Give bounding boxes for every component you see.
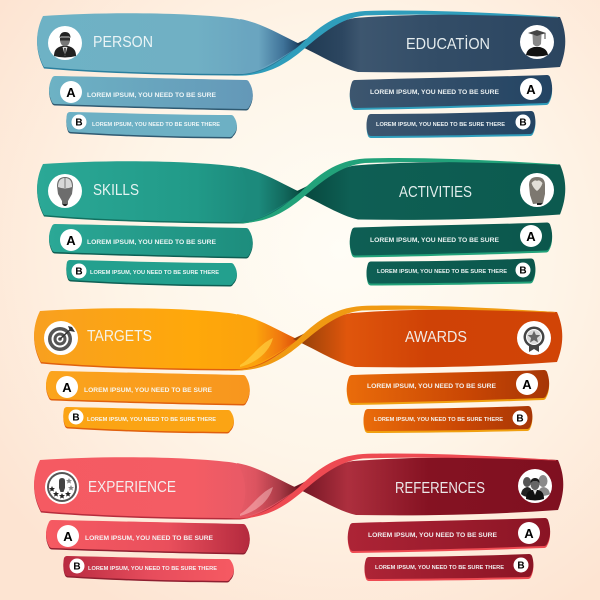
heading: experience: EXPERIENCE (88, 479, 176, 496)
sub-bar B: experience: B (73, 562, 81, 572)
twist band: experience to references (223, 453, 556, 519)
sub-bar B: person (66, 112, 237, 138)
heading: targets: TARGETS (87, 328, 152, 345)
sub-bar B: education (366, 111, 535, 138)
ribbon: education (296, 14, 565, 72)
sub-bar A: references: A (524, 526, 534, 541)
panel: experience (34, 457, 299, 582)
panel: skills (37, 161, 302, 286)
sub-bar B: person: B (75, 118, 83, 128)
sub-bar A: targets (46, 371, 250, 406)
sub-bar B: activities: B (519, 266, 527, 276)
ribbon: skills (37, 161, 302, 224)
heading: person: PERSON (93, 34, 153, 51)
icon: group of three people (518, 469, 552, 503)
heading: skills: SKILLS (93, 182, 139, 199)
sub-bar B: person: LOREM IPSUM, YOU NEED TO BE SURE THERE (92, 122, 220, 128)
ribbon: references (294, 458, 563, 515)
twist band: person to education (225, 10, 558, 76)
heading: activities: ACTIVITIES (399, 184, 472, 201)
sub-bar B: skills (66, 260, 237, 286)
sub-bar B: activities: LOREM IPSUM, YOU NEED TO BE SURE THERE (377, 269, 507, 275)
ribbon: awards (293, 310, 562, 367)
sub-bar A: targets: LOREM IPSUM, YOU NEED TO BE SURE (84, 387, 213, 394)
panel: awards (222, 305, 562, 433)
sub-bar B: experience: LOREM IPSUM, YOU NEED TO BE SURE THERE (88, 566, 217, 572)
sub-bar B: experience (63, 556, 234, 582)
sub-bar A: awards: A (522, 377, 532, 392)
icon: graduate (520, 25, 554, 59)
sub-bar A: experience: LOREM IPSUM, YOU NEED TO BE SURE (85, 535, 214, 542)
sub-bar A: targets: A (62, 380, 72, 395)
sub-bar A: skills (49, 224, 253, 258)
panel: targets (34, 308, 299, 434)
panel: education (225, 10, 565, 138)
sub-bar A: education: LOREM IPSUM, YOU NEED TO BE SURE (370, 89, 500, 96)
sub-bar B: references: LOREM IPSUM, YOU NEED TO BE SURE THERE (375, 565, 504, 571)
twist band: skills to activities (225, 158, 558, 223)
sub-bar A: awards: LOREM IPSUM, YOU NEED TO BE SURE (367, 383, 497, 390)
icon: man with glasses and suit (48, 26, 82, 60)
sub-bar A: education: A (526, 82, 536, 97)
sub-bar B: references: B (517, 560, 525, 572)
sub-bar B: skills: B (75, 266, 83, 278)
sub-bar A: activities: A (526, 229, 536, 244)
sub-bar A: references (348, 518, 550, 553)
twist band: targets to awards (222, 305, 555, 371)
sub-bar B: references (364, 554, 533, 581)
panel: activities (225, 158, 565, 286)
sub-bar B: awards: LOREM IPSUM, YOU NEED TO BE SURE THERE (374, 417, 503, 423)
icon: person surrounded by stars (45, 470, 79, 504)
ribbon: targets (34, 308, 299, 370)
sub-bar A: activities: LOREM IPSUM, YOU NEED TO BE SURE (370, 237, 500, 244)
ribbon: experience (34, 457, 299, 520)
heading: references: REFERENCES (395, 480, 485, 497)
sub-bar A: skills: A (66, 233, 76, 248)
sub-bar B: education: LOREM IPSUM, YOU NEED TO BE SURE THERE (376, 122, 505, 128)
sub-bar B: targets: LOREM IPSUM, YOU NEED TO BE SURE THERE (87, 417, 216, 423)
icon: medal with star (517, 321, 551, 355)
sub-bar B: education: B (519, 118, 527, 128)
sub-bar B: activities (366, 258, 535, 286)
sub-bar A: person: LOREM IPSUM, YOU NEED TO BE SURE (87, 92, 217, 99)
sub-bar A: person: A (66, 85, 76, 100)
sub-bar B: targets (63, 407, 234, 434)
sub-bar B: targets: B (72, 412, 80, 424)
sub-bar A: references: LOREM IPSUM, YOU NEED TO BE SURE (368, 532, 498, 539)
sub-bar B: awards (364, 406, 532, 433)
sub-bar A: person (49, 76, 253, 110)
sub-bar A: education (350, 75, 552, 110)
ribbon: person (37, 13, 302, 76)
sub-bar B: awards: B (516, 414, 524, 424)
icon: head with heart (520, 173, 554, 207)
icon: head with brain (48, 174, 82, 208)
heading: awards: AWARDS (405, 329, 467, 346)
icon: target with arrow (44, 321, 78, 355)
ribbon: activities (296, 162, 565, 220)
sub-bar A: experience (46, 520, 250, 554)
panel: references (223, 453, 563, 581)
panel: person (37, 13, 302, 138)
sub-bar A: skills: LOREM IPSUM, YOU NEED TO BE SURE (87, 239, 217, 246)
sub-bar A: experience: A (63, 529, 73, 544)
sub-bar A: awards (347, 370, 549, 405)
heading: education: EDUCATİON (406, 34, 490, 53)
sub-bar A: activities (350, 222, 552, 258)
sub-bar B: skills: LOREM IPSUM, YOU NEED TO BE SURE THERE (90, 270, 219, 276)
